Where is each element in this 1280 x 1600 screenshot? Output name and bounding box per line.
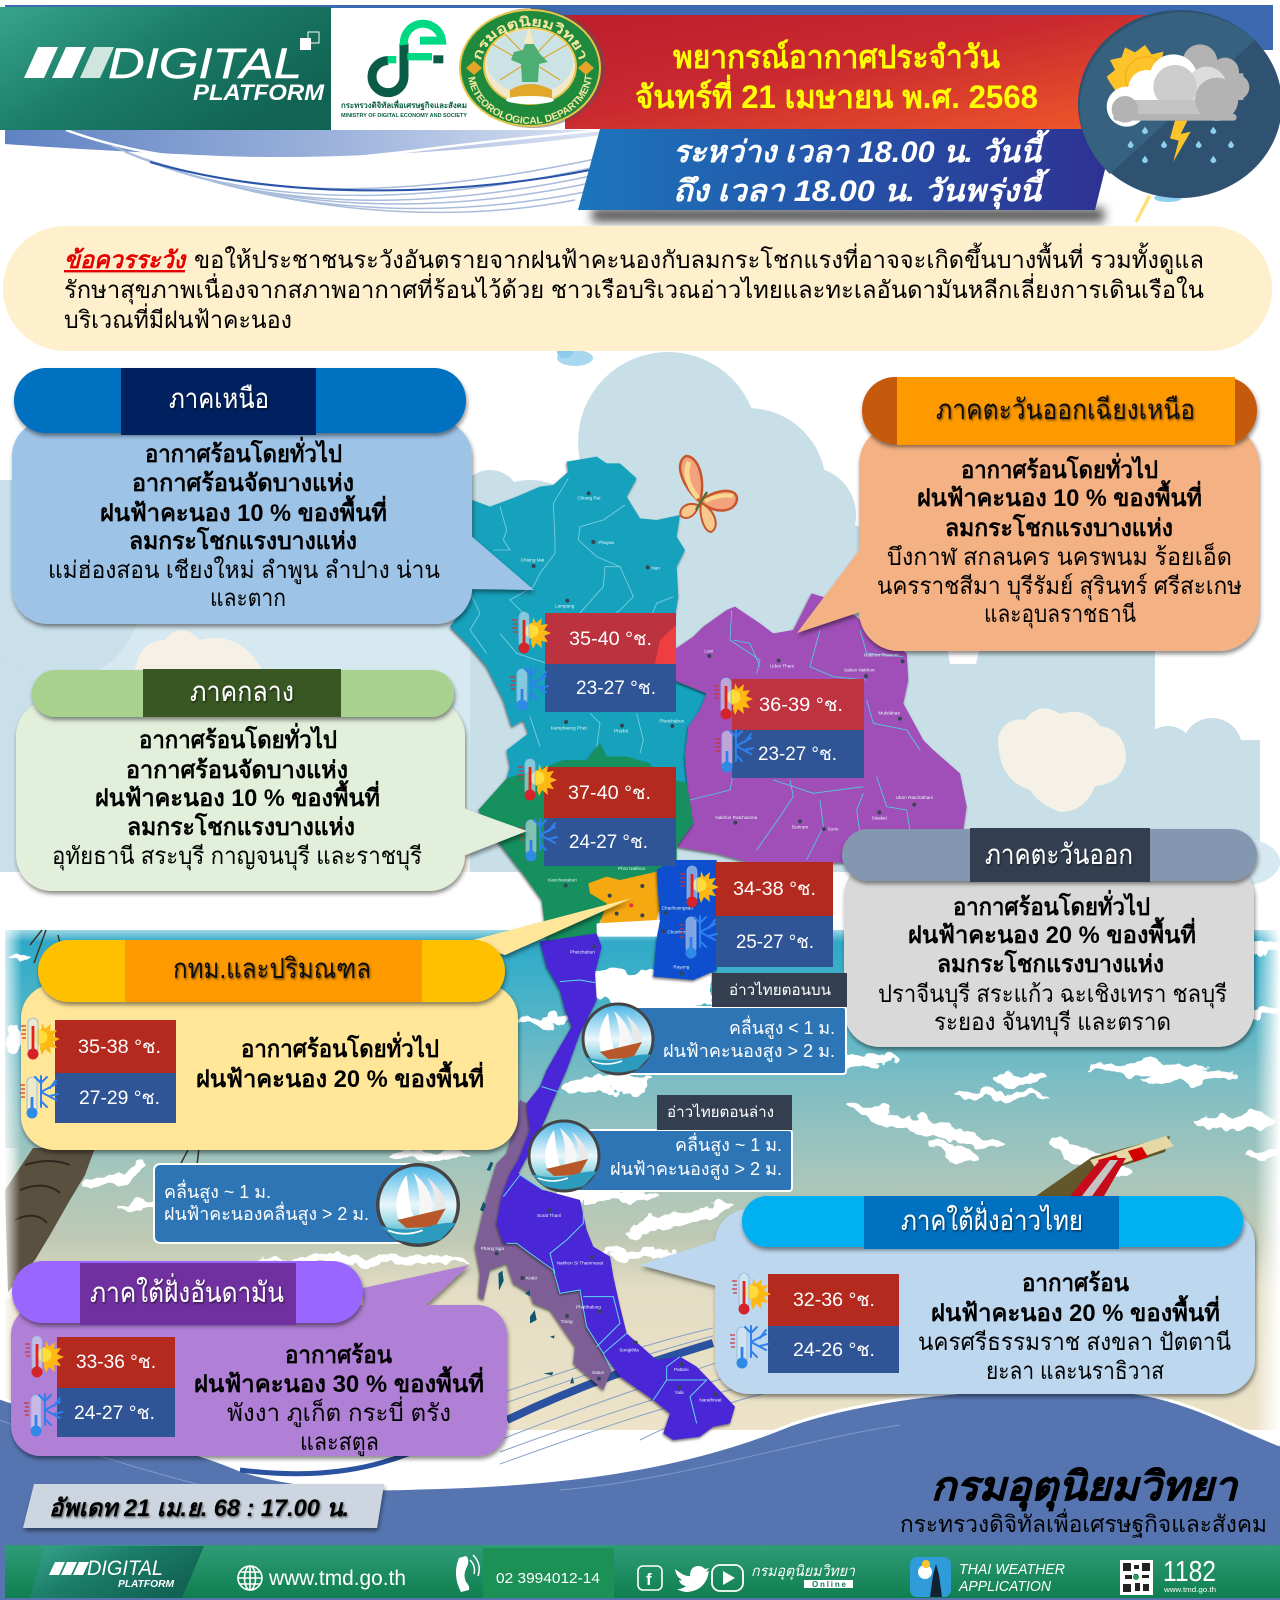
department name: กรมอุตุนิยมวิทยา bbox=[931, 1465, 1239, 1512]
warning text: ขอให้ประชาชนระวังอันตรายจากฝนฟ้าคะนองกับลมกระโชกแรงที่อาจจะเกิดขึ้นบางพื้นที่ รวมทั้งดูแล bbox=[194, 242, 1204, 275]
icon: twitter bbox=[675, 1566, 709, 1592]
logo: de bbox=[372, 24, 443, 93]
text: northeast forecast: บึงกาฬ สกลนคร นครพนม ร้อยเอ็ด bbox=[887, 542, 1232, 571]
map of Thailand bbox=[450, 457, 967, 980]
province labels south: Phang Nga bbox=[481, 1246, 504, 1251]
region: north bbox=[450, 457, 707, 797]
panel: andaman sea condition: ฝนฟ้าคะนองคลื่นสูง > 2 ม. bbox=[164, 1201, 369, 1225]
panel body: northeast bbox=[797, 424, 1259, 651]
header: title band: พยากรณ์อากาศประจำวัน bbox=[673, 39, 1000, 75]
text: bangkok forecast bbox=[196, 1031, 484, 1093]
text: northeast forecast: และอุบลราชธานี bbox=[984, 601, 1136, 629]
text: andaman forecast: พังงา ภูเก็ต กระบี่ ตรัง bbox=[227, 1396, 451, 1428]
temperature: east: 34-38 °ช. bbox=[733, 879, 816, 900]
temperature: bangkok: 27-29 °ช. bbox=[79, 1088, 160, 1109]
header: andaman: ภาคใต้ฝั่งอันดามัน bbox=[90, 1273, 284, 1308]
province labels: Phichit bbox=[614, 728, 629, 733]
province labels: Udon Thani bbox=[770, 663, 794, 668]
province labels: Chonburi bbox=[667, 929, 686, 934]
header: time band: ถึง เวลา 18.00 น. วันพรุ่งนี้ bbox=[673, 168, 1051, 210]
panel: lower gulf sea condition bbox=[529, 1095, 792, 1191]
region: south andaman coast bbox=[475, 1100, 612, 1390]
panel: east bbox=[842, 828, 1257, 1047]
temperature: northeast bbox=[714, 678, 864, 778]
province labels south: Phatthalung bbox=[576, 1304, 601, 1309]
temperature: east: 25-27 °ช. bbox=[736, 932, 814, 953]
header: ministry logo panel: MINISTRY OF DIGITAL ECONOMY AND SOCIETY bbox=[341, 113, 467, 119]
update time box: อัพเดท 21 เม.ย. 68 : 17.00 น. bbox=[49, 1495, 349, 1522]
icon: globe bbox=[238, 1566, 262, 1590]
temperature: northeast: 36-39 °ช. bbox=[759, 695, 843, 716]
text: central forecast: ฝนฟ้าคะนอง 10 % ของพื้นที่ bbox=[95, 779, 380, 812]
icon: phone bbox=[456, 1555, 479, 1592]
province labels south: Trang bbox=[561, 1319, 573, 1324]
header: north bbox=[14, 368, 466, 435]
province labels: Nakhon Phanom bbox=[864, 653, 899, 658]
text: south gulf forecast: ยะลา และนราธิวาส bbox=[986, 1358, 1164, 1385]
panel body: andaman bbox=[11, 1265, 507, 1456]
temperature: bangkok bbox=[20, 1018, 176, 1123]
temperature: andaman bbox=[24, 1336, 175, 1437]
social name: Online bbox=[812, 1580, 847, 1589]
panel: lower gulf sea condition: คลื่นสูง ~ 1 ม. bbox=[675, 1132, 782, 1156]
text: east forecast: ฝนฟ้าคะนอง 20 % ของพื้นที่ bbox=[908, 916, 1196, 949]
text: north forecast: แม่ฮ่องสอน เชียงใหม่ ลำพูน ลำปาง น่าน bbox=[48, 556, 440, 585]
header: ministry logo panel bbox=[331, 8, 531, 128]
andaman islands bbox=[480, 1162, 574, 1383]
text: south gulf forecast: อากาศร้อน bbox=[1022, 1270, 1130, 1297]
temperature: andaman: 24-27 °ช. bbox=[74, 1403, 155, 1424]
header: title band: จันทร์ที่ 21 เมษายน พ.ศ. 2568 bbox=[635, 74, 1038, 115]
province labels south: Surat Thani bbox=[537, 1213, 561, 1218]
footer logo: PLATFORM bbox=[118, 1579, 175, 1590]
region: bangkok and vicinity bbox=[588, 872, 660, 923]
temperature: andaman: 33-36 °ช. bbox=[76, 1352, 156, 1373]
panel: upper gulf sea condition: ฝนฟ้าคะนองสูง > 2 ม. bbox=[663, 1041, 835, 1062]
header: east: ภาคตะวันออก bbox=[985, 839, 1133, 870]
panel: lower gulf sea condition: ฝนฟ้าคะนองสูง > 2 ม. bbox=[610, 1159, 782, 1180]
panel: south andaman side bbox=[11, 1261, 507, 1457]
icon: qr code bbox=[1120, 1560, 1153, 1595]
hotline: www.tmd.go.th bbox=[1163, 1587, 1216, 1594]
panel: upper gulf sea condition: อ่าวไทยตอนบน bbox=[729, 981, 831, 999]
text: andaman forecast bbox=[194, 1342, 484, 1457]
province labels: Kamphaeng Phet bbox=[551, 725, 587, 730]
text: bangkok forecast: อากาศร้อนโดยทั่วไป bbox=[241, 1031, 439, 1063]
province labels: Mukdahan bbox=[878, 710, 900, 715]
province labels south: Krabi bbox=[526, 1276, 537, 1281]
text: central forecast: อุทัยธานี สระบุรี กาญจนบุรี และราชบุรี bbox=[52, 843, 422, 871]
phone number: 02 3994012-14 bbox=[496, 1570, 600, 1587]
temperature: south gulf: 32-36 °ช. bbox=[793, 1290, 875, 1311]
temperature: north: 23-27 °ช. bbox=[576, 678, 656, 699]
header: title band bbox=[565, 15, 1145, 129]
app name bbox=[958, 1561, 1065, 1595]
text: south gulf forecast: ฝนฟ้าคะนอง 20 % ของพื้นที่ bbox=[931, 1294, 1220, 1327]
text: northeast forecast: นครราชสีมา บุรีรัมย์ สุรินทร์ ศรีสะเกษ bbox=[877, 572, 1242, 601]
text: north forecast: และตาก bbox=[210, 585, 286, 612]
social name bbox=[751, 1563, 856, 1589]
panel: central bbox=[16, 669, 527, 891]
province labels: Chiang Mai bbox=[521, 558, 544, 563]
header: digital platform logo: PLATFORM bbox=[193, 80, 325, 105]
warning text bbox=[64, 242, 1204, 334]
text: north forecast: ฝนฟ้าคะนอง 10 % ของพื้นที่ bbox=[100, 494, 387, 527]
header: bangkok bbox=[38, 940, 505, 1002]
province labels: Phayao bbox=[598, 540, 615, 545]
province labels south: Yala bbox=[675, 1390, 684, 1395]
panel: andaman sea condition: คลื่นสูง ~ 1 ม. bbox=[164, 1179, 271, 1203]
panel body: east bbox=[844, 860, 1254, 1047]
text: north forecast: อากาศร้อนโดยทั่วไป bbox=[145, 436, 342, 468]
icon: storm weather badge bbox=[1078, 10, 1280, 222]
text: northeast forecast: ฝนฟ้าคะนอง 10 % ของพื้นที่ bbox=[917, 479, 1202, 512]
header: meteorological department seal: METEOROLOGICAL DEPARTMENT bbox=[468, 74, 592, 124]
province borders south bbox=[503, 980, 707, 1423]
icon: facebook: f bbox=[646, 1570, 652, 1589]
header: digital platform logo: DIGITAL bbox=[108, 40, 302, 88]
header: central bbox=[32, 669, 454, 717]
temperature: central bbox=[518, 759, 676, 866]
panel body: central bbox=[16, 700, 527, 891]
panel body: bangkok bbox=[21, 898, 632, 1150]
text: bangkok forecast: ฝนฟ้าคะนอง 20 % ของพื้นที่ bbox=[196, 1060, 484, 1093]
text: south gulf forecast: นครศรีธรรมราช สงขลา ปัตตานี bbox=[918, 1329, 1231, 1356]
temperature: east bbox=[679, 862, 833, 967]
province labels: Kanchanaburi bbox=[548, 878, 577, 883]
panel body: south gulf bbox=[640, 1209, 1255, 1394]
text: north forecast: ลมกระโชกแรงบางแห่ง bbox=[129, 526, 357, 555]
province labels: Loei bbox=[704, 649, 713, 654]
province labels south: Songkhla bbox=[619, 1348, 639, 1353]
header: time band bbox=[578, 129, 1115, 222]
province labels south: Satun bbox=[592, 1370, 605, 1375]
icon: youtube bbox=[712, 1565, 743, 1591]
header: northeast bbox=[862, 377, 1257, 445]
beach chair bbox=[1036, 1136, 1174, 1196]
province labels: Nakhon Ratchasima bbox=[715, 815, 758, 820]
header top blue strip bbox=[5, 5, 1273, 50]
header: ministry logo panel: กระทรวงดิจิทัลเพื่อเศรษฐกิจและสังคม bbox=[341, 99, 467, 111]
header: south gulf: ภาคใต้ฝั่งอ่าวไทย bbox=[901, 1201, 1083, 1236]
panel: northeast bbox=[797, 377, 1259, 651]
text: north forecast: อากาศร้อนจัดบางแห่ง bbox=[132, 470, 354, 497]
text: andaman forecast: ฝนฟ้าคะนอง 30 % ของพื้นที่ bbox=[194, 1365, 484, 1398]
header: east bbox=[842, 828, 1257, 882]
text: east forecast: ลมกระโชกแรงบางแห่ง bbox=[937, 949, 1164, 978]
province labels south: Narathiwat bbox=[699, 1397, 722, 1402]
header: meteorological department seal: กรมอุตุนิยมวิทยา bbox=[474, 16, 586, 60]
region: south gulf coast bbox=[497, 933, 735, 1440]
app name: APPLICATION bbox=[958, 1578, 1051, 1595]
province labels: Sisaket bbox=[872, 815, 888, 820]
panel: lower gulf sea condition: อ่าวไทยตอนล่าง bbox=[667, 1103, 774, 1121]
province labels: Buriram bbox=[792, 824, 808, 829]
header: south gulf bbox=[742, 1196, 1243, 1249]
icon: thai weather app bbox=[910, 1557, 951, 1597]
panel body: north bbox=[12, 420, 534, 624]
text: north forecast bbox=[48, 436, 440, 612]
province labels: Lampang bbox=[555, 604, 575, 609]
panel: north bbox=[12, 368, 534, 624]
text: central forecast: ลมกระโชกแรงบางแห่ง bbox=[127, 812, 355, 841]
province labels south: Pattani bbox=[674, 1367, 688, 1372]
province labels: Surin bbox=[828, 827, 839, 832]
header: north: ภาคเหนือ bbox=[169, 383, 269, 414]
background: bottom blue wave bbox=[0, 1328, 1280, 1600]
province labels bbox=[521, 491, 933, 975]
text: andaman forecast: อากาศร้อน bbox=[285, 1342, 393, 1369]
text: east forecast bbox=[878, 889, 1227, 1037]
update time box bbox=[23, 1484, 384, 1528]
palm tree trunk and fronds bbox=[0, 930, 199, 1298]
panel: andaman sea condition bbox=[154, 1164, 458, 1245]
text: central forecast: อากาศร้อนจัดบางแห่ง bbox=[126, 757, 348, 784]
text: northeast forecast: ลมกระโชกแรงบางแห่ง bbox=[945, 513, 1173, 542]
text: east forecast: ระยอง จันทบุรี และตราด bbox=[934, 1009, 1171, 1037]
header: digital platform logo bbox=[0, 7, 331, 130]
text: andaman forecast: และสตูล bbox=[300, 1429, 379, 1457]
province labels south: Phetchaburi bbox=[570, 949, 595, 954]
text: east forecast: อากาศร้อนโดยทั่วไป bbox=[953, 889, 1150, 921]
panel: upper gulf sea condition bbox=[583, 973, 847, 1074]
province labels: Chiang Rai bbox=[577, 495, 600, 500]
temperature: central: 24-27 °ช. bbox=[569, 832, 648, 853]
footer band bbox=[5, 1545, 1280, 1598]
province labels: Rayong bbox=[673, 965, 690, 970]
website: www.tmd.go.th bbox=[268, 1567, 406, 1590]
temperature: bangkok: 35-38 °ช. bbox=[78, 1037, 161, 1058]
header: central: ภาคกลาง bbox=[190, 676, 294, 707]
header: time band: ระหว่าง เวลา 18.00 น. วันนี้ bbox=[673, 129, 1050, 169]
text: central forecast: อากาศร้อนโดยทั่วไป bbox=[139, 722, 337, 754]
social name: กรมอุตุนิยมวิทยา bbox=[751, 1563, 856, 1580]
text: central forecast bbox=[52, 722, 422, 871]
warning text: บริเวณที่มีฝนฟ้าคะนอง bbox=[64, 303, 292, 334]
temperature: north: 35-40 °ช. bbox=[569, 629, 652, 650]
temperature: south gulf: 24-26 °ช. bbox=[793, 1340, 875, 1361]
background: sea and beach bbox=[0, 920, 1280, 1430]
province labels south: Nakhon Si Thammarat bbox=[557, 1260, 604, 1265]
province labels south bbox=[481, 945, 722, 1402]
department name: กระทรวงดิจิทัลเพื่อเศรษฐกิจและสังคม bbox=[900, 1508, 1267, 1538]
app name: THAI WEATHER bbox=[959, 1561, 1065, 1578]
hotline: 1182 bbox=[1163, 1556, 1216, 1588]
panel: bangkok and vicinity bbox=[20, 898, 632, 1150]
province labels: Phetchabun bbox=[659, 718, 685, 723]
callout: warning notice bbox=[3, 226, 1272, 351]
background: sky clouds bbox=[0, 346, 1280, 886]
province borders bbox=[470, 478, 920, 860]
header: meteorological department seal bbox=[459, 8, 605, 128]
text: east forecast: ปราจีนบุรี สระแก้ว ฉะเชิงเทรา ชลบุรี bbox=[878, 981, 1227, 1009]
temperature: northeast: 23-27 °ช. bbox=[758, 744, 837, 765]
warning text: รักษาสุขภาพเนื่องจากสภาพอากาศที่ร้อนไว้ด้วย ชาวเรือบริเวณอ่าวไทยและทะเลอันดามันหลีกเลี่ยงการเดินเรือใน bbox=[64, 273, 1204, 305]
icon: facebook bbox=[638, 1566, 662, 1590]
panel: upper gulf sea condition: คลื่นสูง < 1 ม. bbox=[729, 1015, 835, 1039]
province labels: Nan bbox=[651, 565, 660, 570]
swoosh under header bbox=[5, 130, 610, 212]
department name bbox=[900, 1465, 1267, 1538]
header: andaman bbox=[12, 1261, 363, 1325]
temperature: north bbox=[510, 612, 676, 712]
temperature: south gulf bbox=[730, 1273, 899, 1373]
province labels: Sakon Nakhon bbox=[844, 668, 875, 673]
province labels: Chachoengsao bbox=[662, 905, 693, 910]
text: northeast forecast bbox=[877, 452, 1242, 629]
text: northeast forecast: อากาศร้อนโดยทั่วไป bbox=[961, 452, 1158, 484]
panel: south gulf side bbox=[640, 1196, 1255, 1394]
province labels: Ubon Ratchathani bbox=[896, 795, 933, 800]
warning label: ข้อควรระวัง bbox=[64, 247, 187, 274]
region: east bbox=[653, 860, 717, 980]
footer logo bbox=[30, 1546, 204, 1598]
temperature: central: 37-40 °ช. bbox=[568, 783, 651, 804]
text: south gulf forecast bbox=[918, 1270, 1231, 1385]
region: central bbox=[478, 743, 693, 940]
map: southern peninsula bbox=[475, 933, 735, 1440]
footer logo: DIGITAL bbox=[87, 1557, 163, 1580]
icon: butterfly bbox=[680, 456, 737, 532]
province labels: Phra Nakhon bbox=[618, 866, 646, 871]
region: northeast bbox=[673, 593, 967, 863]
header: northeast: ภาคตะวันออกเฉียงเหนือ bbox=[936, 394, 1195, 425]
header: bangkok: กทม.และปริมณฑล bbox=[173, 953, 371, 984]
